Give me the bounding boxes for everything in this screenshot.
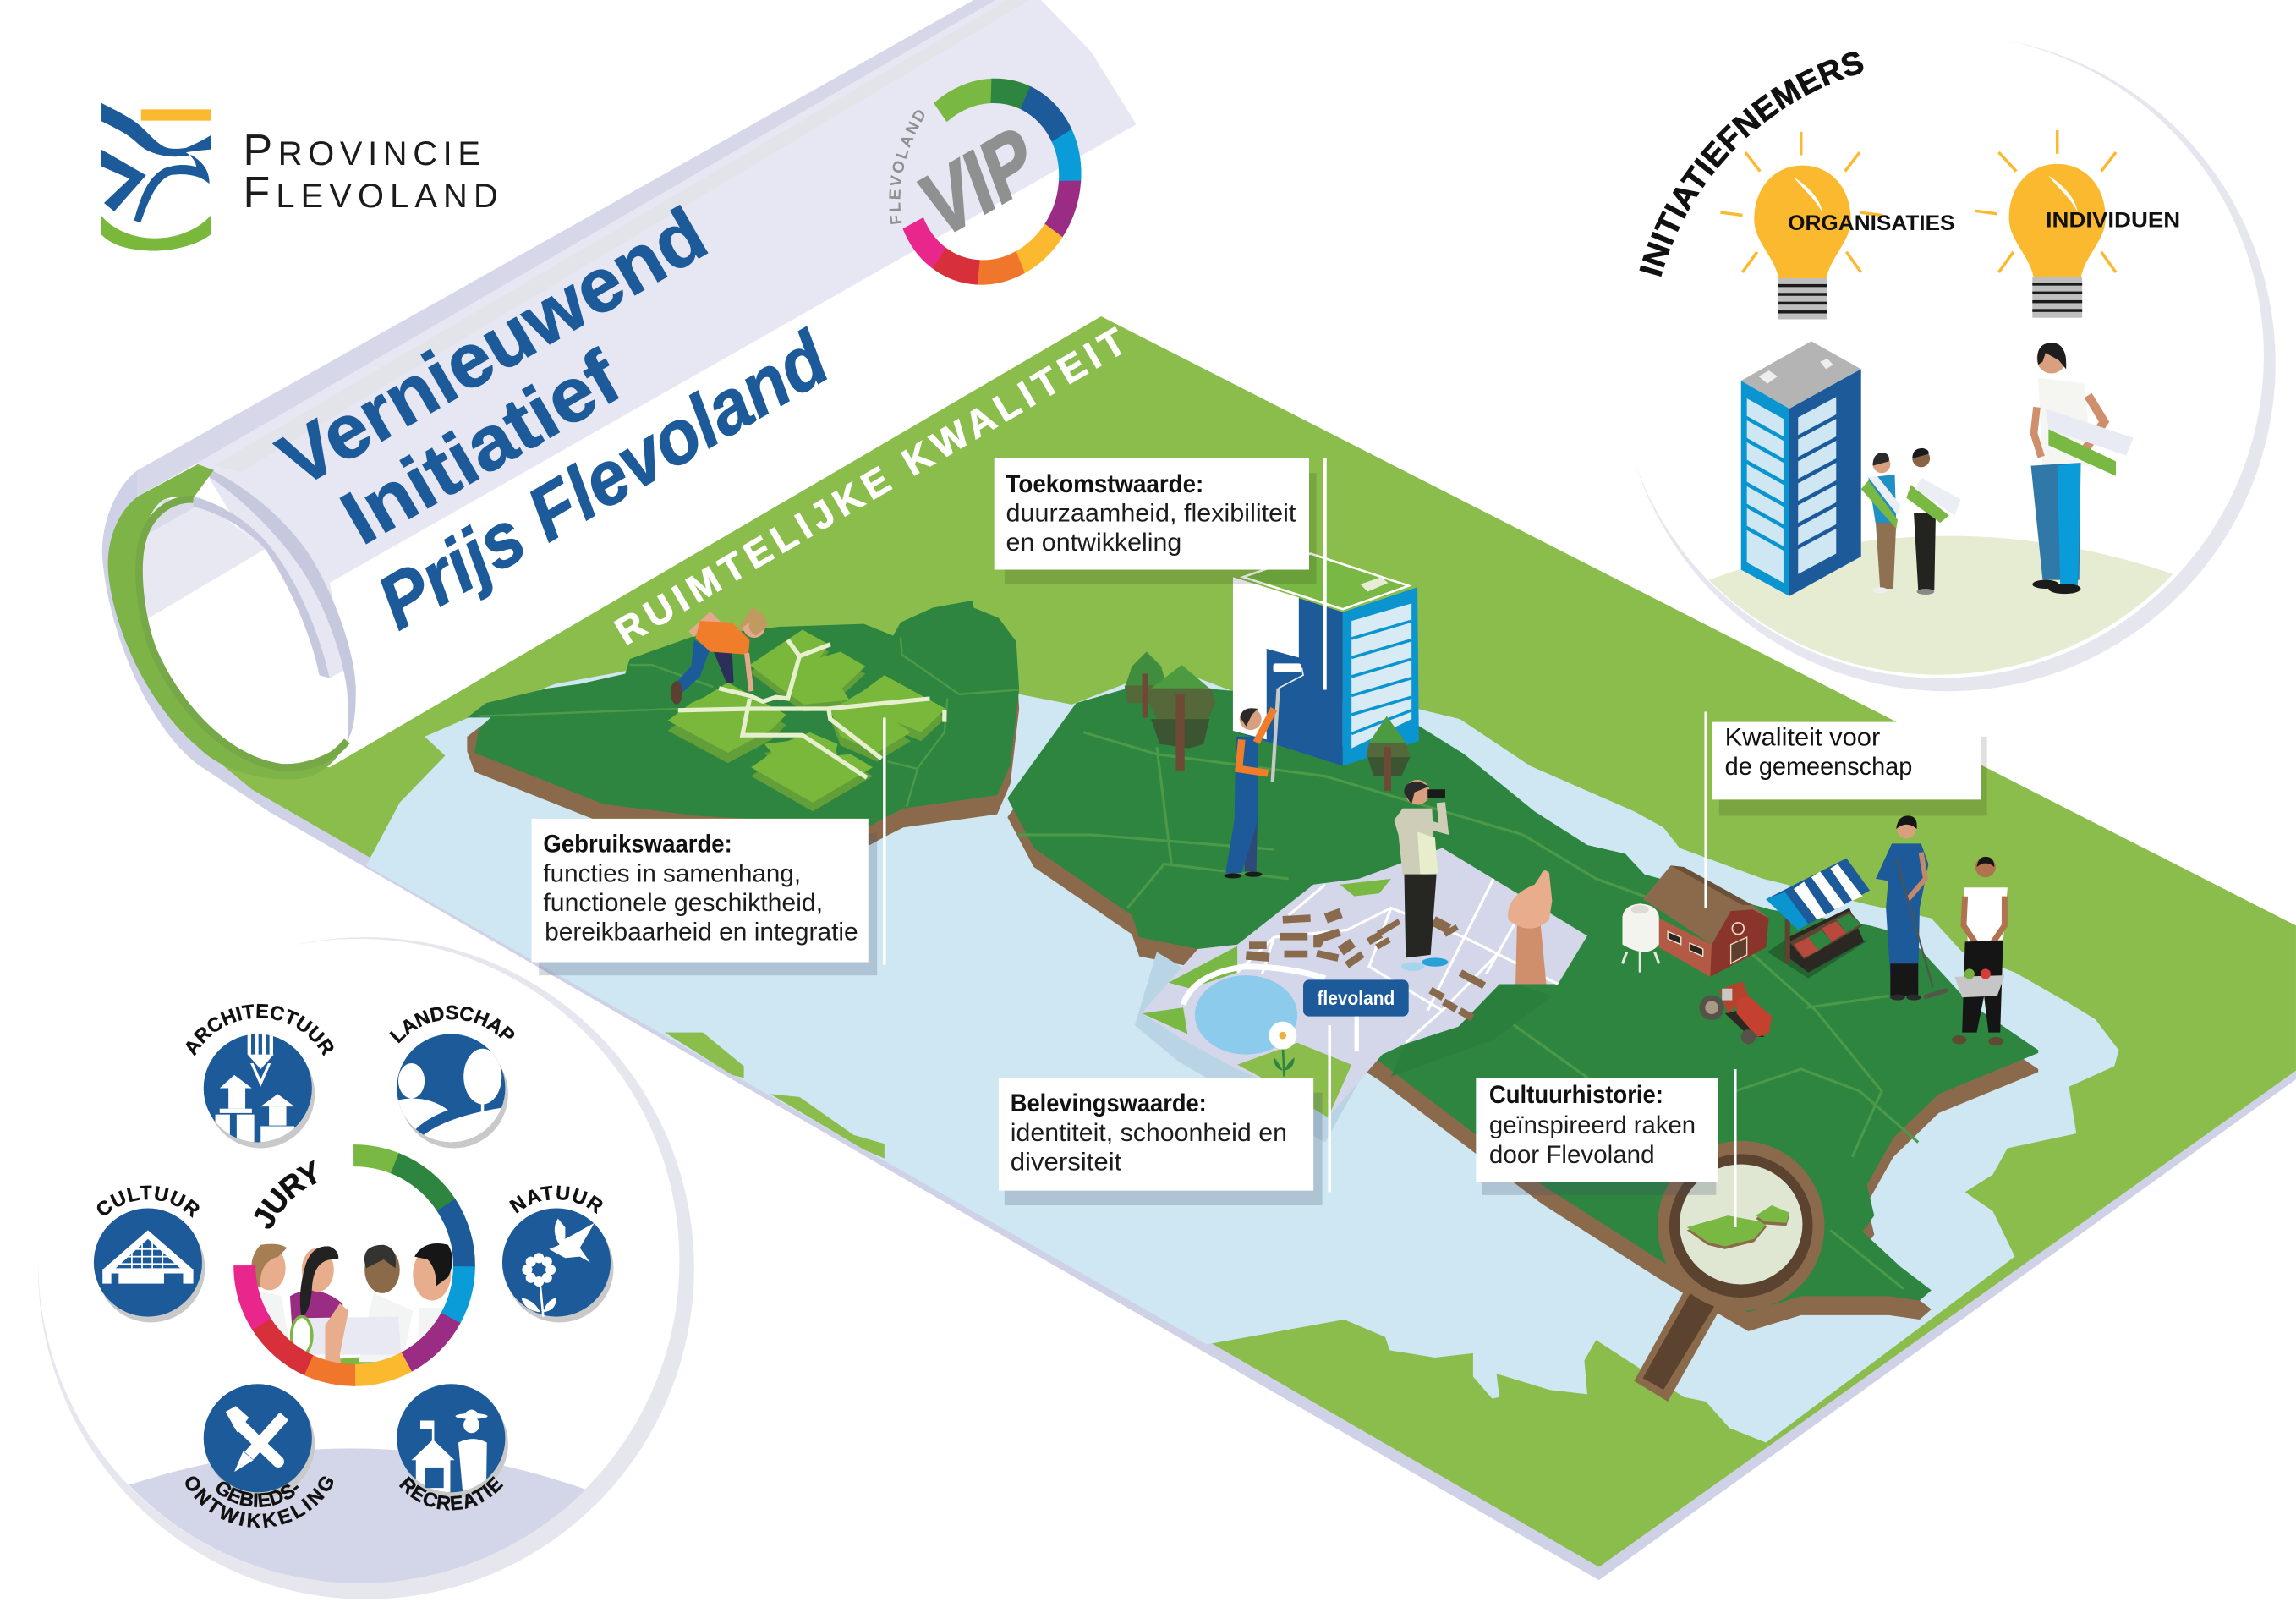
figure: painter: [1225, 663, 1303, 879]
map sheet shadow and roll outer shell: [102, 470, 2296, 1580]
callout: Toekomstwaarde: en ontwikkeling: [1006, 529, 1181, 557]
callout: Kwaliteit voor de gemeenschap: Kwaliteit voor: [1725, 723, 1880, 751]
logo: Provincie Flevoland: [101, 103, 498, 251]
callout: Gebruikswaarde: functies in samenhang,: [543, 859, 801, 887]
callout: Kwaliteit voor de gemeenschap: de gemeenschap: [1725, 753, 1912, 781]
label: landschap: LANDSCHAP: [389, 1005, 514, 1044]
city map sheet: [1135, 848, 1587, 1143]
callout: Cultuurhistorie: door Flevoland: [1489, 1141, 1655, 1169]
rolled map tube: [138, 0, 1137, 678]
tractor: [1699, 981, 1772, 1045]
figure: woman placing puzzle: [671, 608, 767, 705]
label: individuen: INDIVIDUEN: [2046, 208, 2180, 232]
figure: man with binoculars: [1394, 780, 1448, 971]
callout: Belevingswaarde: identiteit, schoonheid en: [1011, 1119, 1287, 1147]
VIP badge: VIP: [912, 107, 1047, 259]
icon: natuur: [502, 1208, 614, 1322]
callout: Cultuurhistorie: geïnspireerd raken: [1489, 1111, 1696, 1139]
roll interior: [140, 498, 348, 765]
label: gebieds-ontwikkeling: GEBIEDS-: [216, 1482, 299, 1507]
panel: initiatiefnemers: [1636, 41, 2276, 692]
icon: architectuur: [204, 1034, 315, 1148]
market stall: [1766, 859, 1870, 979]
silo: [1622, 903, 1659, 973]
callout: Gebruikswaarde: [532, 717, 886, 975]
icon: recreatie: [397, 1384, 508, 1498]
island 1: [467, 601, 1019, 845]
figures: two people with rolled plans: [1861, 448, 1960, 595]
callout: Belevingswaarde: diversiteit: [1011, 1148, 1121, 1176]
callout: Toekomstwaarde: [995, 458, 1327, 690]
label: recreatie: RECREATIE: [399, 1476, 504, 1511]
callout: Kwaliteit voor de gemeenschap: [1704, 711, 1987, 908]
shoreline land bits: [665, 1033, 885, 1159]
VIP badge: FLEVOLAND: [889, 110, 925, 224]
heading: ruimtelijke kwaliteit: RUIMTELIJKE KWALITEIT: [608, 320, 1133, 653]
callout: Toekomstwaarde: Toekomstwaarde:: [1006, 470, 1203, 498]
island 2: [1007, 685, 2038, 1331]
water: [366, 671, 2118, 1442]
icon: bulb organisaties: [1720, 132, 1882, 319]
callout: Gebruikswaarde: bereikbaarheid en integratie: [545, 919, 858, 946]
title: Initiatief: [327, 334, 635, 561]
tree in front of building: [1366, 716, 1410, 791]
outer lip: [198, 464, 356, 741]
title: Vernieuwend: [265, 191, 721, 504]
callout: Toekomstwaarde: duurzaamheid, flexibiliteit: [1006, 499, 1296, 527]
figure: man with rolled plan: [2031, 343, 2134, 594]
building being painted: [1233, 553, 1419, 766]
office tower: [1741, 341, 1861, 596]
figure: woman with basket: [1952, 857, 2008, 1045]
icon: daisy: [1269, 1022, 1296, 1077]
icon: bulb individuen: [1975, 130, 2116, 318]
heading: initiatiefnemers: INITIATIEFNEMERS: [1639, 52, 1864, 277]
map sheet: [200, 316, 2296, 1567]
callout: Belevingswaarde: [999, 1025, 1331, 1205]
callout: Belevingswaarde: Belevingswaarde:: [1011, 1089, 1207, 1117]
VIP badge: [889, 78, 1082, 285]
logo mark: [101, 103, 211, 251]
puzzle pieces with paths: [668, 630, 946, 811]
callout: Cultuurhistorie: Cultuurhistorie:: [1489, 1081, 1663, 1109]
callout: Gebruikswaarde: functionele geschiktheid,: [543, 889, 823, 917]
farm barn: [1643, 865, 1769, 977]
icon: thumbs-up hand: [1508, 870, 1552, 985]
label: flevoland: flevoland: [1317, 987, 1395, 1009]
label: flevoland: [1303, 979, 1409, 1051]
heading: jury: JURY: [254, 1160, 316, 1228]
trees: [1125, 651, 1215, 771]
icon: magnifying glass: [1634, 1141, 1824, 1402]
label: organisaties: ORGANISATIES: [1788, 211, 1955, 235]
green rim: [108, 464, 347, 779]
logo: Provincie Flevoland: F LEVOLAND: [243, 168, 498, 217]
jury members: [252, 1243, 453, 1364]
label: cultuur: CULTUUR: [96, 1186, 200, 1218]
panel: jury: [38, 937, 694, 1599]
icon: landschap: [397, 1034, 508, 1149]
title: [265, 191, 843, 645]
icon: gebiedsontwikkeling: [204, 1384, 315, 1498]
figure: farmer: [1876, 815, 1948, 1001]
logo: Provincie Flevoland: P ROVINCIE: [243, 126, 480, 175]
jury portrait ring: [233, 1144, 475, 1386]
roll end opening: [108, 464, 356, 779]
callout: Gebruikswaarde: Gebruikswaarde:: [543, 831, 732, 859]
inner spiral lip: [194, 497, 330, 678]
label: gebieds-ontwikkeling: ONTWIKKELING: [185, 1477, 333, 1528]
icon: cultuur: [94, 1208, 205, 1322]
label: architectuur: ARCHITECTUUR: [186, 1003, 333, 1056]
label: natuur: NATUUR: [509, 1186, 602, 1215]
ground: [129, 1448, 586, 1583]
title: Prijs Flevoland: [364, 315, 843, 645]
ground: [1709, 536, 2173, 675]
callout: Cultuurhistorie: [1476, 1069, 1737, 1227]
